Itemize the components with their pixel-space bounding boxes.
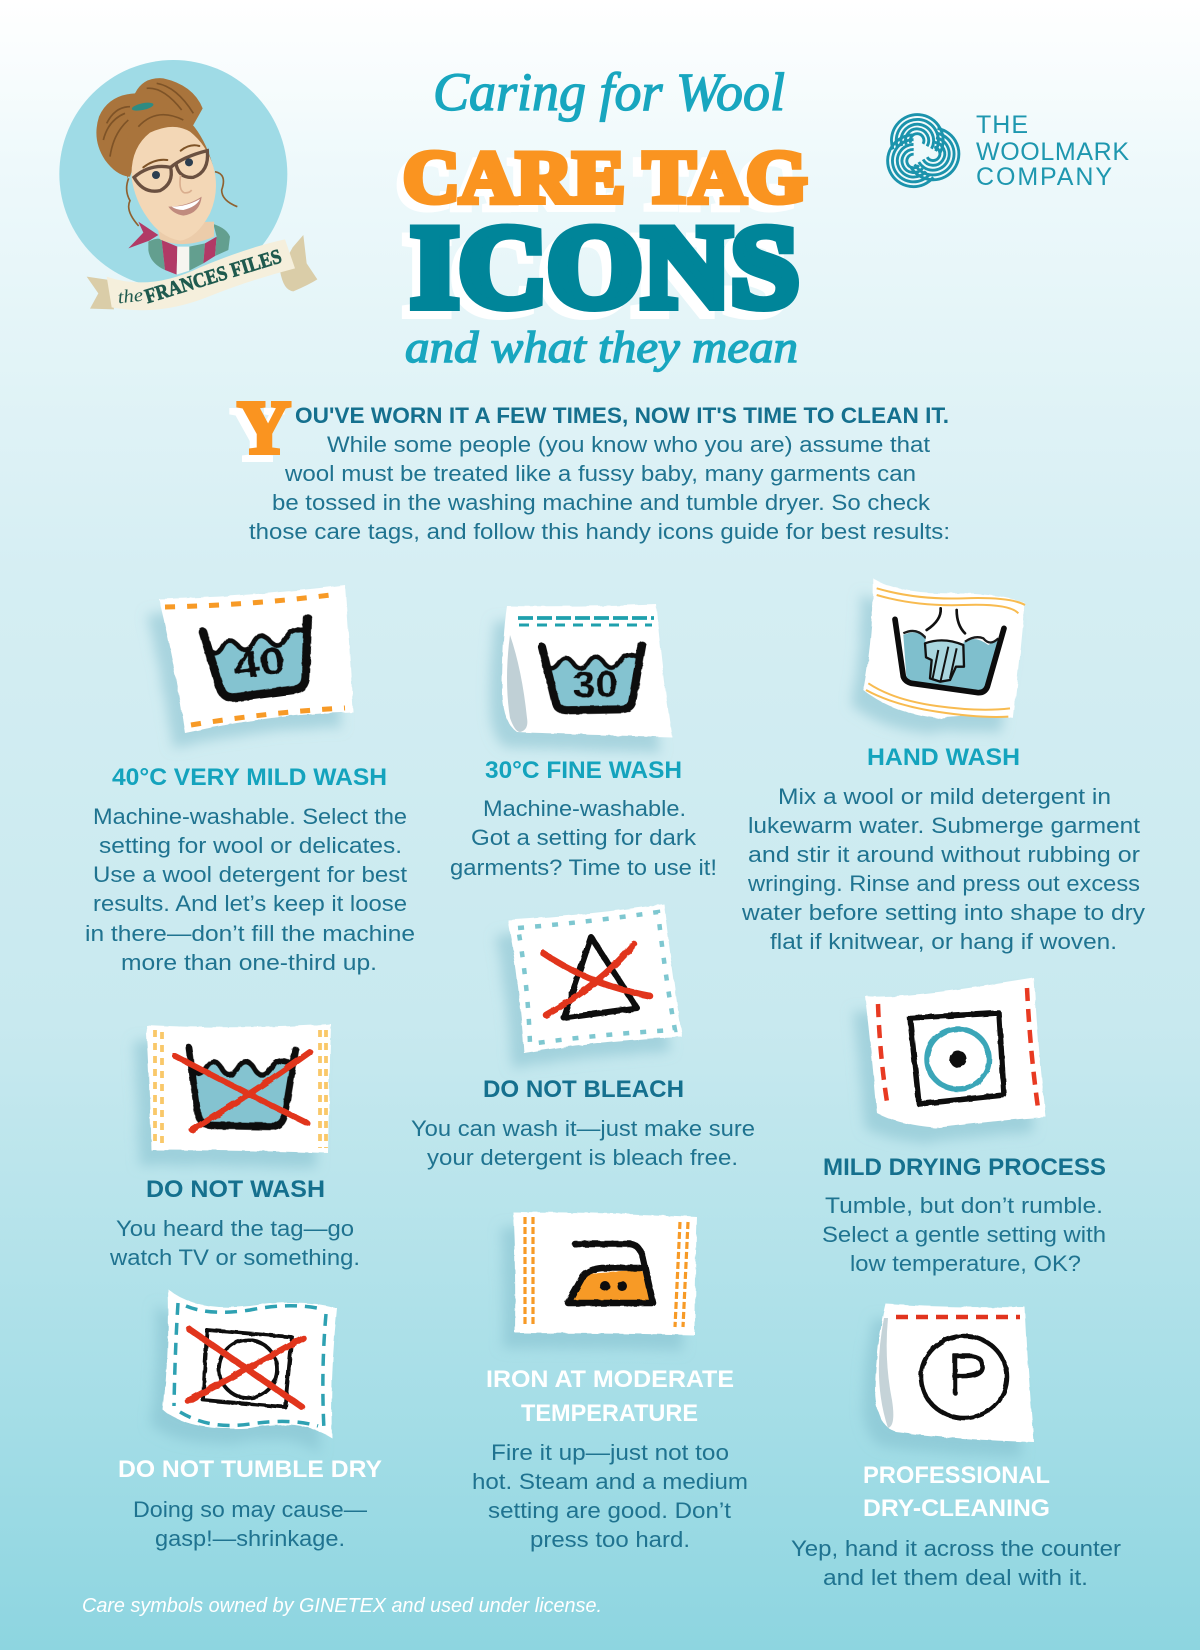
- icon: tag 30: [502, 604, 672, 737]
- icon: wool ball: [878, 115, 968, 196]
- intro text: While some people (you know who you are) assume that: [327, 432, 931, 457]
- panel: iron at moderate temperature: [472, 1212, 748, 1552]
- panel: iron at moderate temperature: setting are good. Don’t: [488, 1498, 732, 1523]
- panel: hand wash: and stir it around without rubbing or: [748, 842, 1141, 867]
- panel: hand wash: flat if knitwear, or hang if woven.: [770, 929, 1117, 954]
- panel: do not tumble dry: Doing so may cause—: [133, 1497, 368, 1522]
- glasses: [134, 151, 208, 191]
- panel: iron at moderate temperature: TEMPERATURE: [521, 1400, 698, 1427]
- heading: Caring for Wool: Caring for Wool: [433, 62, 785, 122]
- panel: 40C very mild wash: more than one-third up.: [121, 950, 377, 975]
- panel: do not bleach: DO NOT BLEACH: [483, 1076, 684, 1103]
- icon: tag 30: 30: [572, 663, 619, 705]
- panel: iron at moderate temperature: IRON AT MODERATE: [486, 1366, 734, 1393]
- panel: 30C fine wash: [450, 604, 717, 880]
- icon: tag iron: [513, 1212, 697, 1335]
- logo: The Woolmark Company: THE: [976, 111, 1028, 139]
- panel: do not wash: [109, 1024, 360, 1270]
- panel: hand wash: HAND WASH: [867, 744, 1020, 771]
- intro text: OU'VE WORN IT A FEW TIMES, NOW IT'S TIME TO CLEAN IT.: [295, 403, 949, 428]
- panel: professional dry-cleaning: PROFESSIONAL: [863, 1462, 1050, 1489]
- intro text: [230, 386, 950, 544]
- panel: 30C fine wash: garments? Time to use it!: [450, 855, 717, 880]
- panel: iron at moderate temperature: press too hard.: [530, 1527, 690, 1552]
- panel: do not wash: watch TV or something.: [109, 1245, 360, 1270]
- banner: the: [117, 285, 144, 308]
- panel: 40C very mild wash: setting for wool or delicates.: [99, 833, 402, 858]
- icon: tag hand wash: [863, 578, 1025, 718]
- panel: do not tumble dry: [118, 1289, 382, 1551]
- panel: 30C fine wash: 30°C FINE WASH: [485, 757, 682, 784]
- banner: FRANCES FILES: [142, 246, 284, 308]
- panel: do not bleach: You can wash it—just make sure: [411, 1116, 755, 1141]
- panel: mild drying process: [822, 978, 1106, 1276]
- panel: mild drying process: MILD DRYING PROCESS: [823, 1154, 1106, 1181]
- panel: professional dry-cleaning: Yep, hand it across the counter: [791, 1536, 1122, 1561]
- heading: ICONS: ICONS: [411, 203, 799, 332]
- panel: 40C very mild wash: in there—don’t fill the machine: [85, 921, 415, 946]
- drop cap Y: Y: [237, 386, 291, 470]
- panel: do not bleach: your detergent is bleach free.: [427, 1145, 738, 1170]
- icon: tag 40: [159, 585, 353, 733]
- logo: The Woolmark Company: WOOLMARK: [976, 138, 1129, 166]
- panel: professional dry-cleaning: DRY-CLEANING: [863, 1495, 1050, 1522]
- panel: iron at moderate temperature: Fire it up—just not too: [491, 1440, 729, 1465]
- panel: hand wash: water before setting into shape to dry: [741, 900, 1146, 925]
- panel: mild drying process: Tumble, but don’t rumble.: [825, 1193, 1103, 1218]
- panel: 30C fine wash: Got a setting for dark: [471, 825, 697, 850]
- footer note: Care symbols owned by GINETEX and used under license.: [82, 1595, 602, 1617]
- illustration: woman portrait: [96, 78, 237, 275]
- panel: mild drying process: Select a gentle setting with: [822, 1222, 1106, 1247]
- panel: hand wash: wringing. Rinse and press out excess: [747, 871, 1140, 896]
- panel: 40C very mild wash: [85, 585, 415, 975]
- logo: The Woolmark Company: COMPANY: [976, 163, 1112, 191]
- avatar: The Frances Files: [59, 60, 317, 310]
- panel: 40C very mild wash: Use a wool detergent for best: [93, 862, 408, 887]
- heading: CARE TAG: CARE TAG: [396, 144, 798, 226]
- panel: do not wash: You heard the tag—go: [116, 1216, 354, 1241]
- intro text: wool must be treated like a fussy baby, many garments can: [284, 461, 916, 486]
- icon: tag no bleach: [508, 904, 682, 1053]
- panel: 30C fine wash: Machine-washable.: [483, 796, 686, 821]
- panel: professional dry-cleaning: [791, 1304, 1122, 1590]
- panel: do not wash: DO NOT WASH: [146, 1176, 325, 1203]
- logo: The Woolmark Company: [878, 111, 1129, 196]
- panel: do not tumble dry: gasp!—shrinkage.: [155, 1526, 345, 1551]
- scarf: [128, 222, 230, 275]
- panel: hand wash: [741, 578, 1146, 954]
- intro text: those care tags, and follow this handy icons guide for best results:: [249, 519, 950, 544]
- icon: tag mild drying: [865, 978, 1046, 1128]
- heading: ICONS: ICONS: [403, 211, 789, 340]
- panel: hand wash: lukewarm water. Submerge garment: [748, 813, 1141, 838]
- panel: mild drying process: low temperature, OK?: [850, 1251, 1081, 1276]
- panel: do not bleach: [411, 904, 755, 1170]
- panel: hand wash: Mix a wool or mild detergent in: [778, 784, 1111, 809]
- panel: professional dry-cleaning: and let them deal with it.: [823, 1565, 1088, 1590]
- panel: iron at moderate temperature: hot. Steam and a medium: [472, 1469, 748, 1494]
- panel: 40C very mild wash: 40°C VERY MILD WASH: [112, 764, 387, 791]
- heading: and what they mean: and what they mean: [405, 323, 798, 372]
- icon: tag 40: 40: [231, 639, 288, 688]
- drop cap Y: Y: [230, 393, 284, 477]
- intro text: be tossed in the washing machine and tumble dryer. So check: [272, 490, 931, 515]
- panel: 40C very mild wash: results. And let’s keep it loose: [93, 891, 407, 916]
- banner: [87, 235, 317, 310]
- icon: tag no wash: [146, 1024, 331, 1153]
- heading: CARE TAG: CARE TAG: [403, 137, 807, 219]
- icon: tag no tumble: [163, 1289, 337, 1438]
- panel: 40C very mild wash: Machine-washable. Select the: [93, 804, 407, 829]
- icon: tag P: [875, 1304, 1034, 1442]
- panel: do not tumble dry: DO NOT TUMBLE DRY: [118, 1456, 382, 1483]
